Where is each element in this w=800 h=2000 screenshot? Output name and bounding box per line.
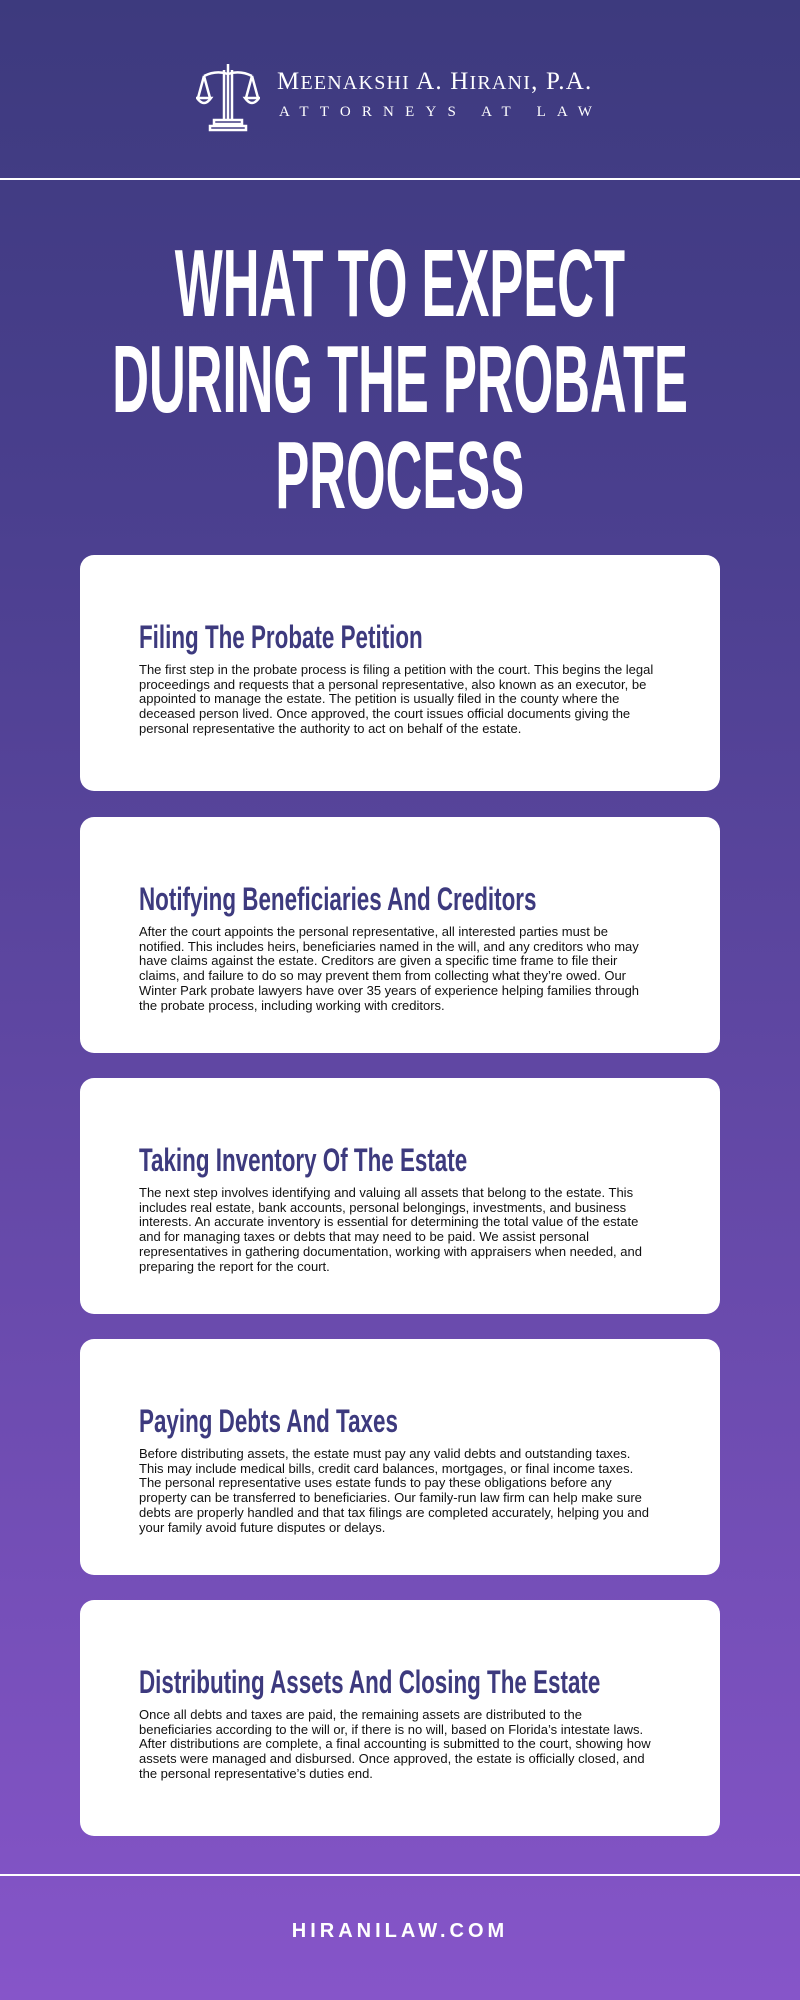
firm name: MEENAKSHI A. HIRANI, P.A. [277,68,592,95]
card: notifying: Notifying Beneficiaries And Creditors [139,881,536,917]
card: debts [80,1339,720,1575]
card: distributing: Once all debts and taxes are paid, the remaining assets are distributed to the beneficiaries according to the will or, if there is no will, based on Florida’s intestate laws. After distributions are complete, a final accounting is submitted to the court, showing how assets were managed and disbursed. Once approved, the estate is officially closed, and the personal representative’s duties end. [139,1707,651,1781]
card: inventory: The next step involves identifying and valuing all assets that belong to the estate. This includes real estate, bank accounts, personal belongings, investments, and business interests. An accurate inventory is essential for determining the total value of the estate and for managing taxes or debts that may need to be paid. We assist personal representatives in gathering documentation, working with appraisers when needed, and preparing the report for the court. [139,1185,642,1274]
tagline: ATTORNEYS AT LAW [279,104,603,120]
card: inventory [80,1078,720,1314]
card: debts: Before distributing assets, the estate must pay any valid debts and outstanding taxes. This may include medical bills, credit card balances, mortgages, or final income taxes. The personal representative uses estate funds to pay these obligations before any property can be transferred to beneficiaries. Our family-run law firm can help make sure debts are properly handled and that tax filings are completed accurately, helping you and your family avoid future disputes or delays. [139,1446,649,1535]
footer url: HIRANILAW.COM [292,1920,508,1942]
card: filing: The first step in the probate process is filing a petition with the court. This begins the legal proceedings and requests that a personal representative, also known as an executor, be appointed to manage the estate. The petition is usually filed in the county where the deceased person lived. Once approved, the court issues official documents giving the personal representative the authority to act on behalf of the estate. [139,662,653,736]
card: notifying: After the court appoints the personal representative, all interested parties must be notified. This includes heirs, beneficiaries named in the will, and any creditors who may have claims against the estate. Creditors are given a specific time frame to file their claims, and failure to do so may prevent them from collecting what they’re owed. Our Winter Park probate lawyers have over 35 years of experience helping families through the probate process, including working with creditors. [139,924,639,1013]
card: distributing: Distributing Assets And Closing The Estate [139,1664,600,1700]
icon: scales [196,64,260,132]
title: PROCESS [276,422,524,529]
card: inventory: Taking Inventory Of The Estate [139,1142,467,1178]
card: filing [80,555,720,791]
title: WHAT TO EXPECT [175,230,625,337]
title: DURING THE PROBATE [112,326,688,433]
title [112,230,688,529]
card: distributing [80,1600,720,1836]
logo [196,64,603,132]
card: notifying [80,817,720,1053]
card: filing: Filing The Probate Petition [139,619,423,655]
card: debts: Paying Debts And Taxes [139,1403,398,1439]
